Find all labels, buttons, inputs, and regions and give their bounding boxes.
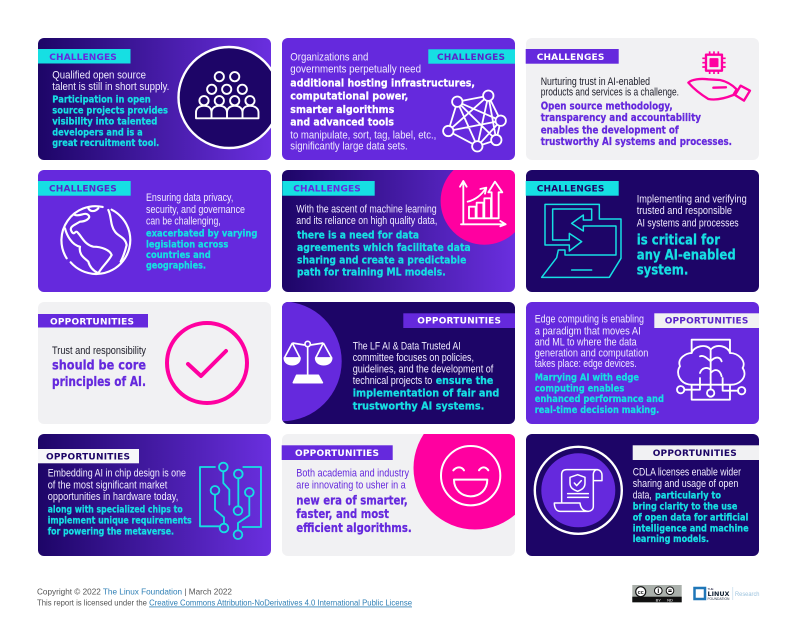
label: opportunities <box>282 445 393 460</box>
text block: security, and governance <box>146 204 245 216</box>
text block: and its reliance on high quality data, <box>296 215 437 227</box>
logo: The Linux Foundation Research: THE <box>708 587 714 591</box>
text block: significantly large data sets. <box>290 141 408 153</box>
footer: copyright text: Copyright © 2022 The Linux Foundation | March 2022 <box>37 588 232 596</box>
text block: new era of smarter, <box>296 492 408 507</box>
label: opportunities <box>654 313 759 328</box>
panel: edge computing <box>526 302 759 424</box>
icon: license document <box>535 447 622 534</box>
text block: Embedding AI in chip design is one <box>48 467 186 479</box>
text block: Both academia and industry <box>296 468 410 480</box>
text block: guidelines, and the development of <box>353 364 493 376</box>
text block: sharing and create a predictable <box>297 254 466 266</box>
text block: enables the development of <box>541 124 679 136</box>
label: opportunities <box>633 445 759 460</box>
panel: LF AI trusted committee <box>282 302 515 424</box>
text block: implementation of fair and <box>353 388 499 400</box>
text block: enhanced performance and <box>535 394 664 405</box>
text block: should be core <box>52 358 146 374</box>
panel: data privacy <box>38 170 271 292</box>
text block: The LF AI & Data Trusted AI <box>353 340 461 352</box>
text block: system. <box>637 262 688 278</box>
text block: trustworthy AI systems. <box>353 401 484 413</box>
text block: Marrying AI with edge <box>535 373 639 384</box>
text block: computing enables <box>535 383 625 394</box>
text block: governments perpetually need <box>290 63 421 75</box>
panel: infrastructure needs <box>282 38 515 160</box>
icon: smiling face <box>441 446 500 505</box>
label: opportunities <box>403 313 515 328</box>
text block: AI systems and processes <box>637 217 739 229</box>
purple circle backdrop <box>282 302 342 422</box>
text block: talent is still in short supply. <box>52 81 169 93</box>
label: challenges: CHALLENGES <box>293 185 361 195</box>
label: challenges: CHALLENGES <box>49 53 117 63</box>
panel: data agreements <box>282 170 515 292</box>
text block: Qualified open source <box>52 69 146 81</box>
text block: transparency and accountability <box>541 112 701 124</box>
label: challenges <box>526 49 619 64</box>
text block: can be challenging, <box>146 215 221 227</box>
icon: creative commons badge: ND <box>667 597 673 602</box>
panel: nurturing trust <box>526 38 759 160</box>
logo: The Linux Foundation Research: Research <box>735 591 760 598</box>
text block <box>637 194 747 278</box>
text block: Edge computing is enabling <box>535 313 644 325</box>
icon: creative commons badge <box>632 585 682 602</box>
text block: technical projects to <box>353 375 432 387</box>
text block: implement unique requirements <box>48 515 192 526</box>
text block <box>353 340 499 413</box>
text block: Implementing and verifying <box>637 194 747 206</box>
text block: trusted and responsible <box>637 205 732 217</box>
text block: and advanced tools <box>290 116 394 129</box>
label: opportunities: OPPORTUNITIES <box>46 453 130 463</box>
text block: sharing and usage of open <box>633 478 738 490</box>
text block <box>535 313 664 416</box>
text block: for powering the metaverse. <box>48 526 174 537</box>
label: opportunities: OPPORTUNITIES <box>653 449 737 459</box>
text block: great recruitment tool. <box>52 138 159 149</box>
text block: a paradigm that moves AI <box>535 326 641 338</box>
text block: of the most significant market <box>48 480 167 492</box>
text block <box>296 468 412 535</box>
pink circle backdrop <box>440 170 515 245</box>
footer: copyright text <box>37 588 412 608</box>
label: challenges <box>38 181 131 196</box>
label: opportunities <box>38 314 148 328</box>
text block: Ensuring data privacy, <box>146 192 233 204</box>
panel: CDLA licenses <box>526 434 759 556</box>
text block: source projects provides <box>52 106 168 117</box>
icon: scales of justice <box>284 341 332 383</box>
text block <box>48 467 192 537</box>
text block: is critical for <box>637 232 720 248</box>
text block: developers and is a <box>52 127 143 138</box>
text block: With the ascent of machine learning <box>296 203 437 215</box>
label: challenges <box>282 181 375 196</box>
text block: ensure the <box>436 375 493 387</box>
icon: group of people <box>178 47 280 148</box>
label: challenges <box>428 49 515 64</box>
text block: countries and <box>146 250 211 261</box>
text block: data, <box>633 489 652 501</box>
text block: particularly to <box>655 490 721 501</box>
label: opportunities: OPPORTUNITIES <box>295 449 379 459</box>
text block: there is a need for data <box>297 229 419 241</box>
icon: AI brain cloud circuit <box>677 340 745 400</box>
text block <box>296 203 471 279</box>
text block: opportunities in hardware today, <box>48 491 178 503</box>
text block: of open data for artificial <box>633 512 748 523</box>
label: challenges: CHALLENGES <box>537 185 604 195</box>
text block: principles of AI. <box>52 375 146 390</box>
text block <box>52 345 147 390</box>
icon: network <box>443 90 506 152</box>
text block <box>146 192 257 272</box>
text block: generation and computation <box>535 347 648 359</box>
text block: path for training ML models. <box>297 267 446 279</box>
panel: AI in chip design <box>38 434 271 556</box>
text block <box>52 69 169 149</box>
pink circle backdrop <box>414 434 515 530</box>
text block: bring clarity to the use <box>633 501 737 512</box>
label: opportunities: OPPORTUNITIES <box>50 318 134 328</box>
icon: laptop with arrows <box>542 204 621 277</box>
text block: Open source methodology, <box>541 100 673 112</box>
text block: Trust and responsibility <box>52 345 147 357</box>
text block: takes place: edge devices. <box>535 358 637 370</box>
text block: and ML to where the data <box>535 337 637 349</box>
icon: hand holding chip <box>688 51 750 101</box>
text block: learning models. <box>633 534 709 545</box>
text block: efficient algorithms. <box>296 520 412 535</box>
logo: The Linux Foundation Research: FOUNDATION <box>708 597 730 601</box>
icon: creative commons badge: BY <box>656 597 661 602</box>
text block: geographies. <box>146 261 206 272</box>
text block: computational power, <box>290 90 408 103</box>
label: challenges: CHALLENGES <box>49 185 117 195</box>
text block: real-time decision making. <box>535 405 659 416</box>
label: opportunities: OPPORTUNITIES <box>417 317 501 327</box>
icon: check mark circle <box>167 323 247 403</box>
text block: along with specialized chips to <box>48 505 183 516</box>
panel: smarter algorithms <box>282 434 515 556</box>
icon: circuit <box>200 463 261 539</box>
label: opportunities: OPPORTUNITIES <box>665 317 748 327</box>
text block <box>633 466 749 545</box>
text block: trustworthy AI systems and processes. <box>541 136 732 148</box>
logo: The Linux Foundation Research: LINUX <box>708 590 730 598</box>
label: challenges <box>526 181 619 196</box>
text block: Participation in open <box>52 95 151 106</box>
panel: trusted AI systems <box>526 170 759 292</box>
text block: committee focuses on policies, <box>353 352 474 364</box>
label: challenges <box>38 49 130 64</box>
footer: copyright text: This report is licensed under the Creative Commons Attribution-NoDerivatives 4.0 International Public License <box>37 598 412 608</box>
text block: intelligence and machine <box>633 523 749 534</box>
text block: agreements which facilitate data <box>297 242 471 254</box>
text block: visibility into talented <box>52 116 157 128</box>
panel: core principles <box>38 302 271 424</box>
label: challenges: CHALLENGES <box>537 53 604 63</box>
text block: faster, and most <box>296 506 389 521</box>
text block: are innovating to usher in a <box>296 480 406 492</box>
text block: Nurturing trust in AI-enabled <box>541 76 650 88</box>
logo: The Linux Foundation Research <box>694 587 760 601</box>
text block: Organizations and <box>290 52 368 64</box>
label: opportunities <box>38 449 139 463</box>
text block: smarter algorithms <box>290 103 395 116</box>
text block: to manipulate, sort, tag, label, etc., <box>290 130 436 142</box>
text block: products and services is a challenge. <box>541 87 679 99</box>
label: challenges: CHALLENGES <box>437 53 505 63</box>
text block <box>541 76 732 148</box>
text block: exacerbated by varying <box>146 229 257 240</box>
text block: CDLA licenses enable wider <box>633 466 741 478</box>
text block: legislation across <box>146 239 229 250</box>
text block: any AI-enabled <box>637 247 736 263</box>
text block: additional hosting infrastructures, <box>290 77 475 90</box>
icon: creative commons badge: cc <box>638 590 644 596</box>
icon: growth chart <box>460 181 506 226</box>
panel: open source talent <box>38 38 280 160</box>
text block <box>290 52 475 153</box>
icon: globe <box>61 206 130 274</box>
